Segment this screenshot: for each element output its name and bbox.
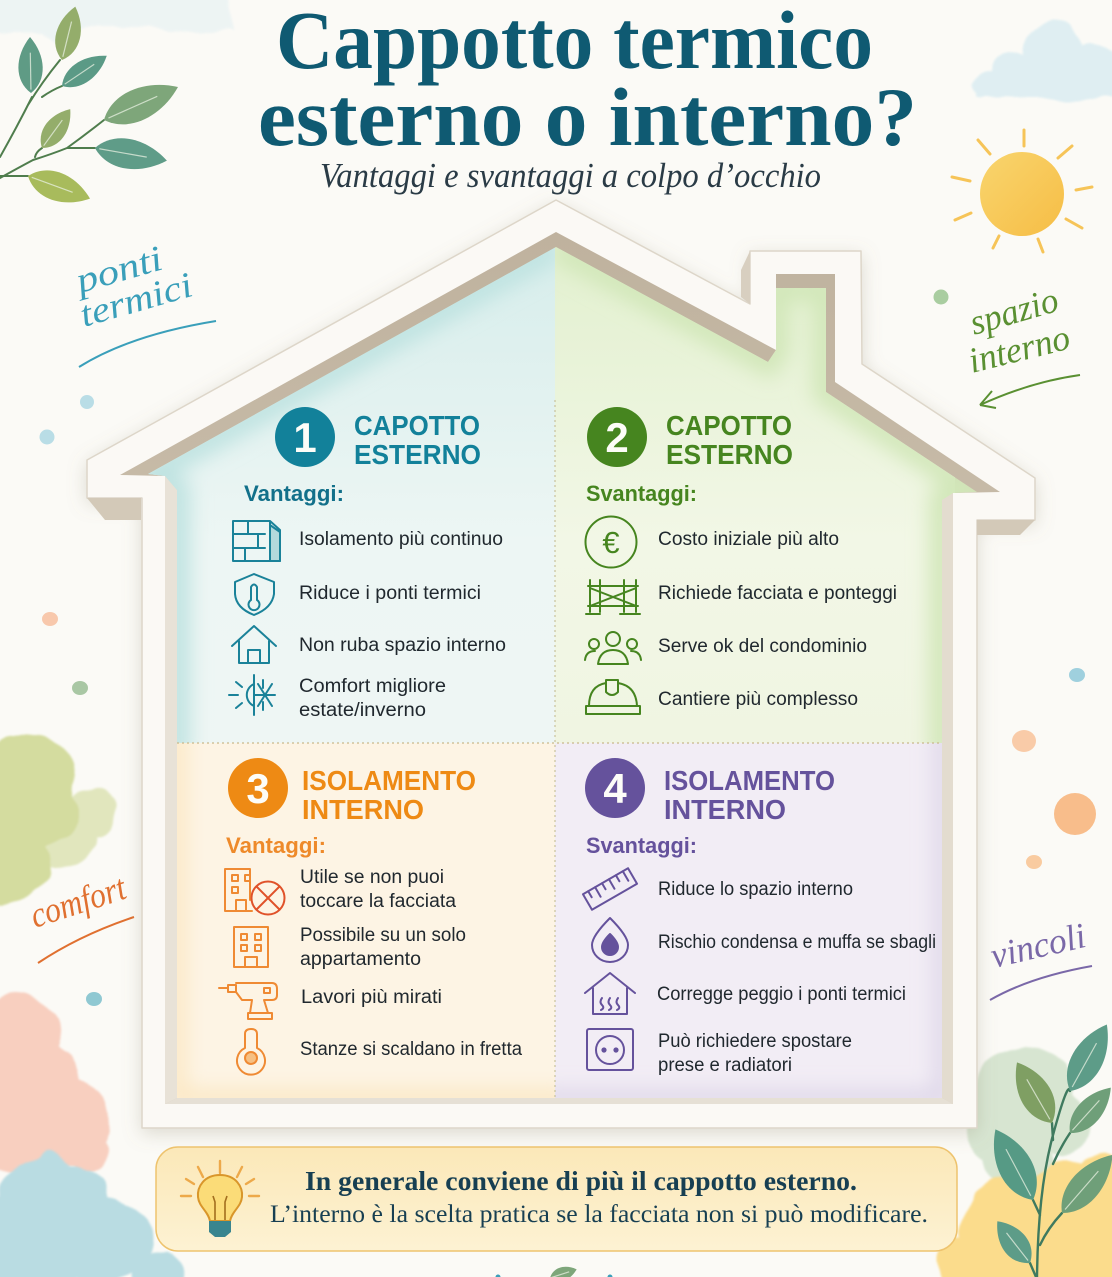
number badge 4 [585,758,645,818]
plant: top left branch [0,4,184,212]
panel: isolamento interno svantaggi [583,758,936,1076]
panel: isolamento interno vantaggi [219,758,522,1075]
list item: Non ruba spazio interno [299,635,506,656]
list item: Stanze si scaldano in fretta [300,1039,522,1060]
heading panel 3 [302,765,476,825]
handwritten note: spazio interno: spazio [965,279,1063,343]
panel: capotto esterno vantaggi [229,407,506,721]
list item: Corregge peggio i ponti termici [657,984,906,1005]
handwritten note: comfort: comfort [25,867,131,936]
icon: house [232,626,276,663]
watercolor cloud: green left [0,736,118,906]
list item: Può richiedere spostare [658,1031,852,1052]
list item: Lavori più mirati [301,987,442,1008]
list item: estate/inverno [299,700,426,721]
list item: Costo iniziale più alto [658,529,839,550]
list item [299,676,446,721]
list item: Cantiere più complesso [658,689,858,710]
heading panel 1: ESTERNO [354,439,481,470]
quadrant backgrounds [120,240,977,1103]
watercolor cloud: yellow right [937,1154,1112,1277]
icon: apartment building [234,927,268,967]
list item: appartamento [300,949,421,970]
subheading: Vantaggi: [244,481,344,506]
heading panel 3: ISOLAMENTO [302,765,476,796]
handwritten note: ponti termici: ponti [68,238,167,302]
panel: capotto esterno svantaggi [585,407,897,714]
callout text line 2: L’interno è la scelta pratica se la facciata non si può modificare. [270,1201,928,1228]
subtitle: Vantaggi e svantaggi a colpo d’occhio [320,156,821,195]
heading panel 4: INTERNO [664,794,786,825]
watercolor cloud: pink left [0,996,108,1172]
decorative dots [40,290,1096,1006]
icon: thermometer [237,1029,265,1075]
callout: conclusion [156,1147,957,1251]
icon: ruler [583,868,637,910]
number badge 2: 2 [605,414,629,461]
icon: sun [952,130,1092,252]
title [258,0,917,163]
number badge 2 [587,407,647,467]
list item [300,925,466,970]
callout text: In generale conviene di più il cappotto esterno. [305,1166,857,1196]
list item: Serve ok del condominio [658,636,867,657]
handwritten note: spazio interno [964,279,1080,408]
subheading: Svantaggi: [586,481,697,506]
icon: scaffold [586,580,640,614]
bottom decorative leaf and dots [496,1263,612,1277]
icon: euro [586,516,636,568]
title: esterno o interno? [258,71,917,163]
icon: light bulb [181,1161,259,1237]
heading panel 4 [664,765,835,825]
list item: prese e radiatori [658,1055,792,1076]
icon: moisture drop [592,918,628,962]
heading panel 4: ISOLAMENTO [664,765,835,796]
handwritten note: ponti termici: termici [75,265,197,335]
watercolor cloud: blue left [0,1155,188,1277]
heading panel 1 [354,410,481,470]
subheading: Vantaggi: [226,833,326,858]
number badge 3 [228,758,288,818]
house frame [87,200,1035,1128]
list item: Comfort migliore [299,676,446,697]
handwritten note: vincoli: vincoli [987,915,1089,976]
icon: brick wall [233,521,280,561]
icon: sun and snowflake [229,675,275,715]
heading panel 1: CAPOTTO [354,410,480,441]
handwritten note: comfort [25,867,134,963]
handwritten note: spazio interno: interno [964,317,1074,381]
list item: Isolamento più continuo [299,529,503,550]
heading panel 3: INTERNO [302,794,424,825]
number badge 1: 1 [293,414,317,461]
plant: bottom right branch [981,1017,1112,1277]
heading panel 2: ESTERNO [666,439,793,470]
list item: toccare la facciata [300,891,456,912]
number badge 3: 3 [246,765,270,812]
number badge 1 [275,407,335,467]
heading panel 2 [666,410,793,470]
number badge 4: 4 [603,765,627,812]
list item: Possibile su un solo [300,925,466,946]
icon: drill [219,983,277,1019]
heading panel 2: CAPOTTO [666,410,792,441]
icon: people [585,632,641,664]
handwritten note: ponti termici [68,238,216,367]
list item: Rischio condensa e muffa se sbagli [658,932,936,953]
icon: euro: € [602,525,620,560]
icon: building with forbidden sign [225,869,284,914]
list item: Utile se non puoi [300,867,444,888]
icon: wall socket [587,1029,633,1070]
list item: Riduce i ponti termici [299,583,481,604]
list item: Richiede facciata e ponteggi [658,583,897,604]
icon: shield thermometer [235,574,274,615]
list item [658,1031,852,1076]
subheading: Svantaggi: [586,833,697,858]
watercolor cloud: top right [972,26,1112,98]
watercolor cloud: top left [0,0,230,42]
icon: house with heat [585,973,635,1014]
icon: hard hat [586,680,640,714]
watercolor cloud: green right [968,1044,1092,1199]
list item [300,867,456,912]
list item: Riduce lo spazio interno [658,879,853,900]
